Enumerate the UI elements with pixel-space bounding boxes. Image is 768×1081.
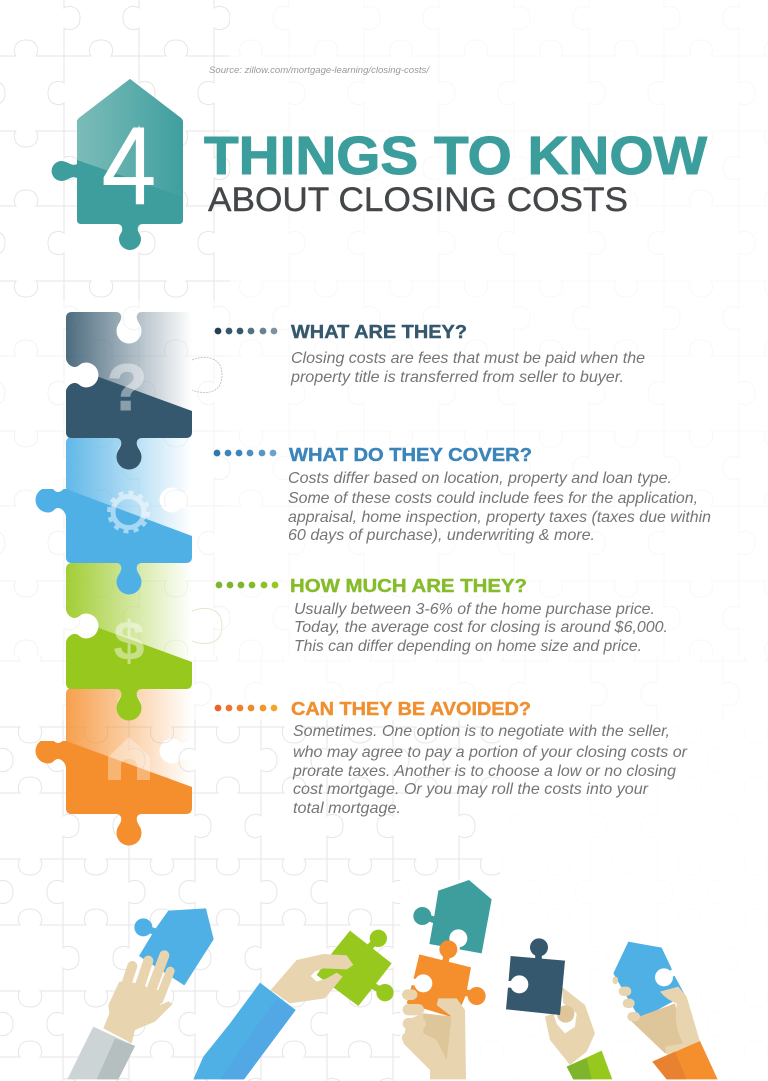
hand	[613, 977, 700, 1055]
puzzle piece: orange house	[36, 688, 192, 846]
number 4: 4	[101, 110, 159, 226]
body text: Closing costs are fees that must be paid when the	[291, 350, 645, 367]
heading: HOW MUCH ARE THEY?	[290, 576, 527, 596]
body text: property title is transferred from seller to buyer.	[290, 369, 624, 386]
illustration: teal house piece and orange piece in hand	[402, 880, 492, 1079]
dots	[214, 450, 276, 456]
heading: WHAT ARE THEY?	[291, 322, 467, 342]
icon: question mark: ?	[107, 350, 147, 424]
hand	[402, 989, 466, 1079]
hand	[103, 955, 173, 1043]
section: how much are they	[216, 576, 668, 655]
title line 1: THINGS TO KNOW	[204, 126, 707, 186]
hand	[271, 954, 353, 1003]
body text	[292, 723, 688, 817]
body text	[288, 470, 711, 544]
puzzle piece: blue gear	[36, 438, 192, 594]
body text: Sometimes. One option is to negotiate with the seller,	[293, 723, 670, 740]
body text: 60 days of purchase), underwriting & more.	[288, 527, 595, 544]
heading: WHAT DO THEY COVER?	[289, 445, 532, 465]
body text: Usually between 3-6% of the home purchase price.	[294, 601, 655, 618]
body text: Costs differ based on location, property and loan type.	[288, 470, 672, 487]
body text: This can differ depending on home size and price.	[294, 638, 642, 655]
hand	[545, 987, 595, 1065]
teal piece	[413, 880, 492, 953]
icon: teal house puzzle with number 4	[52, 79, 183, 250]
green sleeve	[567, 1051, 612, 1079]
grey sleeve	[67, 1027, 135, 1079]
illustration: hand reaching for blue house piece	[67, 908, 214, 1079]
body text: cost mortgage. Or you may roll the costs into your	[293, 781, 649, 798]
blue piece	[613, 942, 685, 1019]
heading: CAN THEY BE AVOIDED?	[291, 699, 531, 719]
body text	[290, 350, 645, 386]
icon: gear	[109, 492, 148, 532]
body text: Today, the average cost for closing is around $6,000.	[294, 619, 668, 636]
navy piece	[506, 938, 565, 1015]
illustration: hand holding green piece	[193, 930, 394, 1079]
green piece	[317, 930, 394, 1006]
dots	[216, 582, 278, 588]
title line 2: ABOUT CLOSING COSTS	[208, 181, 628, 219]
illustration: hand holding blue piece	[613, 942, 718, 1079]
dots	[215, 705, 277, 711]
body text: total mortgage.	[293, 800, 401, 817]
body text: appraisal, home inspection, property taxes (taxes due within	[288, 509, 711, 526]
section: what do they cover	[214, 445, 711, 544]
icon: house	[108, 737, 150, 780]
section: what are they	[215, 322, 645, 386]
body text: prorate taxes. Another is to choose a low or no closing	[292, 763, 676, 780]
body text: who may agree to pay a portion of your closing costs or	[293, 744, 688, 761]
dots	[215, 328, 277, 334]
body text	[294, 601, 668, 655]
puzzle piece: green dollar	[66, 563, 222, 733]
blue house piece	[134, 908, 214, 985]
section: can they be avoided	[215, 699, 688, 817]
title	[204, 126, 707, 219]
icon: dollar: $	[113, 609, 145, 672]
illustration: hand holding navy piece	[506, 938, 612, 1079]
source line: Source: zillow.com/mortgage-learning/closing-costs/	[209, 65, 430, 76]
orange piece	[407, 940, 486, 1017]
blue sleeve	[193, 983, 296, 1079]
puzzle piece: navy question mark	[66, 312, 222, 482]
body text: Some of these costs could include fees for the application,	[288, 490, 698, 507]
orange sleeve	[652, 1041, 718, 1079]
